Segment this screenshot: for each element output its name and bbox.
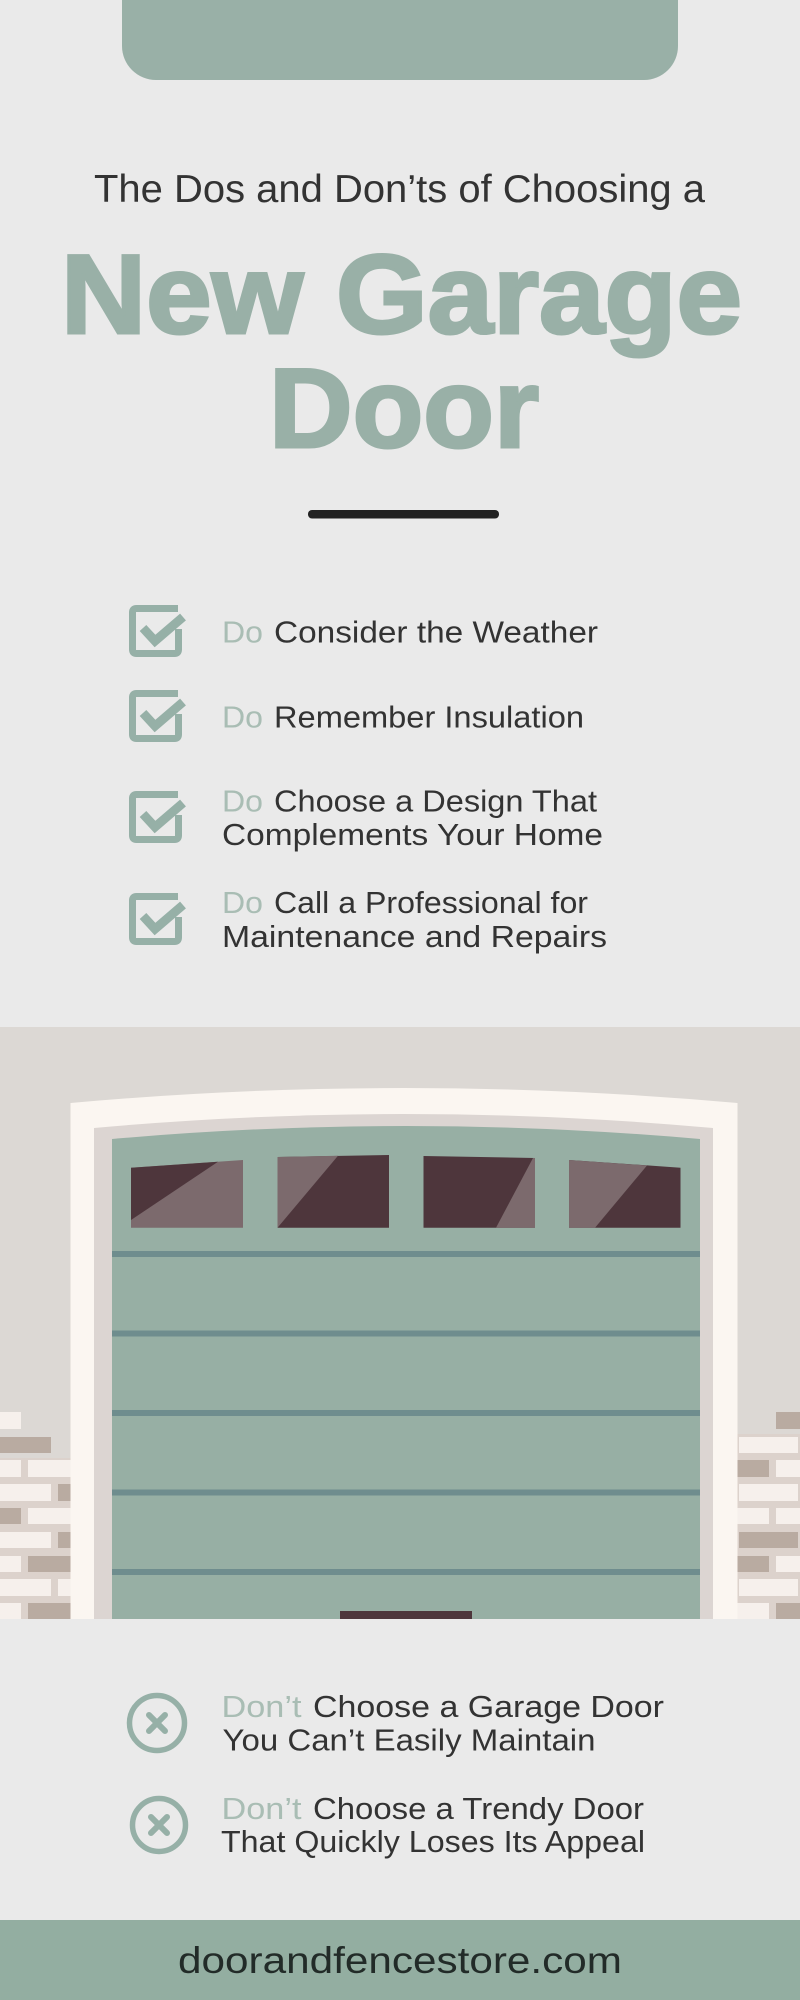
icon: checkbox: [132, 608, 183, 654]
do item 4: [132, 885, 607, 954]
icon: checkbox: [132, 896, 183, 942]
dont item 2: Don’t: [222, 1791, 302, 1826]
do item 3: Do: [222, 784, 263, 818]
do item 4: Do: [222, 885, 263, 920]
window 2: [278, 1155, 389, 1228]
do item 3: [132, 784, 603, 852]
do item 1: [132, 608, 598, 654]
do item 2: [132, 694, 584, 738]
window 1: [131, 1160, 243, 1228]
do item 3: Complements Your Home: [222, 817, 603, 852]
door recess: [94, 1114, 713, 1619]
do item 1: Consider the Weather: [274, 614, 598, 650]
window 3: [424, 1156, 535, 1228]
footer band: doorandfencestore.com: [178, 1940, 622, 1981]
title: Door: [269, 346, 539, 471]
icon: checkbox: [132, 694, 183, 738]
panel: donts list: [130, 1689, 664, 1859]
title: [61, 232, 742, 471]
garage illustration: [0, 1027, 800, 1619]
door frame: [70, 1088, 738, 1619]
do item 3: Choose a Design That: [274, 784, 597, 818]
do item 2: Remember Insulation: [274, 700, 584, 734]
dont item 2: That Quickly Loses Its Appeal: [221, 1824, 645, 1859]
dont item 1: [130, 1689, 664, 1758]
right brick wall: [737, 1412, 800, 1619]
wall: [0, 1027, 800, 1619]
dont item 2: [132, 1791, 645, 1859]
do item 4: Maintenance and Repairs: [222, 919, 607, 954]
window 4: [569, 1160, 680, 1228]
dont item 1: Choose a Garage Door: [313, 1689, 664, 1724]
subtitle: The Dos and Don’ts of Choosing a: [94, 168, 706, 211]
door panel lines: [112, 1251, 700, 1575]
door handle: [340, 1611, 472, 1619]
dont item 1: You Can’t Easily Maintain: [222, 1722, 596, 1758]
title divider: [308, 510, 499, 518]
footer band: [0, 1920, 800, 2000]
do item 2: Do: [222, 700, 263, 734]
icon: checkbox: [132, 794, 183, 840]
title: New Garage: [61, 232, 742, 357]
left brick wall: [0, 1412, 71, 1619]
do item 4: Call a Professional for: [274, 885, 588, 920]
top tab: [122, 0, 678, 80]
icon: x circle: [132, 1798, 186, 1852]
dont item 1: Don’t: [222, 1689, 302, 1724]
garage door: [112, 1126, 700, 1619]
icon: x circle: [130, 1696, 184, 1750]
panel: dos list: [132, 608, 607, 954]
do item 1: Do: [222, 614, 263, 650]
dont item 2: Choose a Trendy Door: [313, 1791, 644, 1826]
